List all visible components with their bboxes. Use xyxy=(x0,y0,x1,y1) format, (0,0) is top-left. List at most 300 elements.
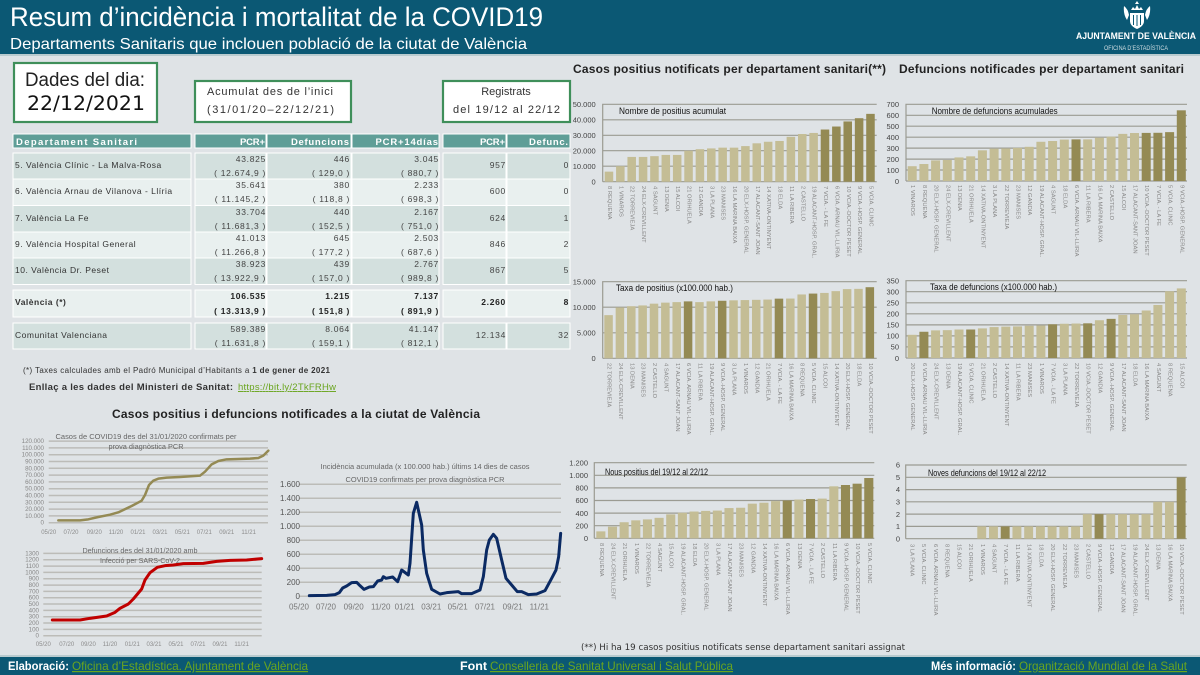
table header xyxy=(13,134,570,148)
bar chart: positive rate: 18 ELDA xyxy=(856,363,862,386)
bar chart: new positives: 13 DENIA xyxy=(796,543,802,569)
bar chart: new positives: 6 VCIA. ARNAU VIL-LLIRIA xyxy=(784,543,790,615)
row: Dr. Peset: 5 xyxy=(564,265,569,275)
ministry link xyxy=(29,382,336,393)
bar chart: cumulative positives: 23 MANISES xyxy=(720,186,726,220)
footer banner: Oficina d’Estadística. Ajuntament de València xyxy=(72,659,308,673)
line chart: cumulative deaths: 1000 xyxy=(25,569,40,576)
bar chart: death rate: 6 VCIA. ARNAU VIL-LLIRIA xyxy=(921,363,927,435)
organisation name: AJUNTAMENT DE VALÈNCIA xyxy=(1076,31,1196,41)
line chart: cumulative cases: 120.000 xyxy=(22,438,45,445)
bar chart: death rate: 0 xyxy=(895,354,899,363)
bar chart: positive rate: 22 TORREVIEJA xyxy=(606,363,612,407)
bar chart: death rate: 50 xyxy=(891,342,899,352)
row: La Fe: ( 11.681,3 ) xyxy=(215,221,266,231)
bar chart: death rate: 200 xyxy=(886,310,899,318)
line chart: 14-day incidence: 800 xyxy=(287,536,301,545)
bar chart: cumulative positives: 16 LA MARINA BAIXA xyxy=(731,186,737,243)
footer banner: Organització Mundial de la Salut xyxy=(1019,659,1188,673)
bar chart: new positives: 17 ALACANT-SANT JOAN xyxy=(726,543,732,612)
row: Clínic: 5. València Clínic - La Malva-Rosa xyxy=(15,160,162,170)
bar chart: new positives: 23 MANISES xyxy=(738,543,744,577)
row: Comunitat Valenciana: 32 xyxy=(558,330,569,340)
line chart: 14-day incidence: 05/21 xyxy=(448,602,468,612)
bar chart: cumulative deaths: 19 ALACANT-HOSP. GRAL. xyxy=(1038,185,1044,258)
bar chart: positive rate: 15.000 xyxy=(573,278,596,286)
bar chart: positive rate: 6 VCIA. ARNAU VIL-LLIRIA xyxy=(685,363,691,435)
bar chart: new deaths xyxy=(896,460,1187,617)
footer banner xyxy=(0,655,1200,675)
bar chart: new deaths: 2 CASTELLO xyxy=(1084,544,1090,580)
bar chart: positive rate: 20 ELX-HOSP. GENERAL xyxy=(844,363,850,431)
row: Dr. Peset: ( 13.922,9 ) xyxy=(214,273,266,283)
bar chart: death rate: 350 xyxy=(886,276,899,286)
line chart: cumulative deaths: 03/21 xyxy=(146,642,162,648)
bar chart: new deaths: 6 xyxy=(896,460,900,470)
bar chart: new positives: 200 xyxy=(575,522,588,530)
bar chart: death rate: 19 ALACANT-HOSP. GRAL. xyxy=(956,363,962,436)
line chart: cumulative cases: 01/21 xyxy=(130,530,146,536)
bar chart: positive rate: 9 VCIA.-HOSP. GENERAL xyxy=(719,363,725,432)
bar chart: cumulative positives: 10 VCIA.-DOCTOR PESET xyxy=(845,186,851,257)
bar chart: new positives: 800 xyxy=(575,484,588,492)
bar chart: new positives: 3 LA PLANA xyxy=(714,543,720,575)
row: La Fe: ( 152,5 ) xyxy=(312,221,350,231)
recent period box: del 19/12 al 22/12 xyxy=(453,104,560,116)
row: Hospital General: ( 687,6 ) xyxy=(401,247,439,257)
bar chart: cumulative deaths xyxy=(886,100,1187,258)
row: Arnau: ( 11.145,2 ) xyxy=(215,194,266,204)
bar chart: cumulative deaths: Nombre de defuncions acumulades xyxy=(932,106,1058,116)
bar chart: new deaths: 17 ALACANT-SANT JOAN xyxy=(1120,544,1126,613)
line chart: cumulative deaths: 700 xyxy=(29,588,40,595)
bar chart: positive rate: 7 VCIA. - LA FE xyxy=(776,363,782,404)
line chart: cumulative deaths: Infecció per SARS-CoV-2 xyxy=(100,558,180,565)
line chart: cumulative cases: 09/20 xyxy=(87,530,102,536)
line chart: cumulative deaths: 600 xyxy=(29,595,40,602)
line chart: cumulative cases: 30.000 xyxy=(25,499,45,506)
bar chart: positive rate: 3 LA PLANA xyxy=(731,363,737,395)
table header: Defuncions xyxy=(291,137,349,148)
line chart: cumulative deaths: 1100 xyxy=(26,563,40,570)
bar chart: positive rate: 10 VCIA.-DOCTOR PESET xyxy=(867,363,873,434)
line chart: cumulative deaths: 05/20 xyxy=(36,642,51,648)
bar chart: new positives: 24 ELX-CREVILLENT xyxy=(610,543,616,600)
bar chart: new deaths: 13 DENIA xyxy=(1155,544,1161,570)
date box: Dades del dia: xyxy=(25,70,145,91)
bar chart: death rate: Taxa de defuncions (x100.000 hab.) xyxy=(930,282,1057,292)
bar chart: death rate: 1 VINAROS xyxy=(1038,363,1044,394)
bar chart: new positives: Nous positius del 19/12 al 22/12 xyxy=(605,467,708,477)
bar chart: cumulative positives: 7 VCIA. - LA FE xyxy=(822,186,828,227)
line chart: 14-day incidence: 01/21 xyxy=(395,602,415,612)
bar chart: cumulative deaths: 2 CASTELLO xyxy=(1108,185,1114,221)
cumulative period box xyxy=(195,81,351,122)
bar chart: positive rate: 2 CASTELLO xyxy=(651,363,657,399)
bar chart: cumulative deaths: 300 xyxy=(886,144,899,153)
cumulative period box: Acumulat des de l’inici xyxy=(207,86,333,98)
line chart: cumulative deaths: 500 xyxy=(29,601,40,608)
row: Clínic: 43.825 xyxy=(236,154,266,164)
bar chart: cumulative positives: 4 SAGUNT xyxy=(652,186,658,215)
line chart: cumulative cases: 100.000 xyxy=(22,452,45,459)
line chart: cumulative cases: 60.000 xyxy=(25,479,45,486)
line chart: 14-day incidence: Incidència acumulada (x 100.000 hab.) últims 14 dies de casos xyxy=(320,464,530,471)
heading: deaths by department: Defuncions notificades per departament sanitari xyxy=(899,62,1184,76)
bar chart: new deaths: 10 VCIA.-DOCTOR PESET xyxy=(1178,544,1184,615)
line chart: 14-day incidence: 07/20 xyxy=(316,602,337,612)
bar chart: death rate: 5 VCIA. CLINIC xyxy=(968,363,974,404)
line chart: cumulative cases xyxy=(22,434,268,536)
row: Clínic: ( 129,0 ) xyxy=(312,168,350,178)
bar chart: cumulative positives xyxy=(573,100,877,259)
bar chart: positive rate: 17 ALACANT-SANT JOAN xyxy=(674,363,680,432)
bar chart: positive rate: 11 LA RIBERA xyxy=(696,363,702,401)
recent period box xyxy=(443,81,570,122)
line chart: cumulative cases: Casos de COVID19 des del 31/01/2020 confirmats per xyxy=(56,434,237,441)
footer banner: Conselleria de Sanitat Universal i Salut Pública xyxy=(490,659,733,673)
bar chart: positive rate: 23 MANISES xyxy=(640,363,646,397)
bar chart: death rate: 7 VCIA. - LA FE xyxy=(1050,363,1056,404)
row: Arnau xyxy=(13,179,570,206)
bar chart: positive rate: 13 DENIA xyxy=(628,363,634,389)
line chart: cumulative cases: 0 xyxy=(41,520,45,527)
row: La Fe: 440 xyxy=(334,207,350,217)
line chart: cumulative cases: 20.000 xyxy=(25,506,45,513)
bar chart: new deaths: 19 ALACANT-HOSP. GRAL. xyxy=(1131,544,1137,617)
bar chart: positive rate: 5 VCIA. CLINIC xyxy=(810,363,816,404)
bar chart: positive rate: 12 GANDIA xyxy=(753,363,759,393)
bar chart: cumulative positives: 0 xyxy=(592,178,596,186)
row: Hospital General: 9. València Hospital General xyxy=(15,239,136,249)
header banner xyxy=(0,0,1200,56)
bar chart: new deaths: 24 ELX-CREVILLENT xyxy=(1143,544,1149,601)
line chart: cumulative cases: 70.000 xyxy=(25,472,45,479)
bar chart: new deaths: 22 TORREVIEJA xyxy=(1061,544,1067,588)
bar chart: cumulative positives: 22 TORREVIEJA xyxy=(629,186,635,230)
bar chart: death rate: 250 xyxy=(886,298,899,308)
line chart: cumulative deaths: 09/21 xyxy=(212,642,228,648)
bar chart: positive rate: 10.000 xyxy=(573,303,596,312)
bar chart: new deaths: 16 LA MARINA BAIXA xyxy=(1166,544,1172,601)
row: La Fe: ( 751,0 ) xyxy=(401,221,439,231)
line chart: cumulative deaths: 11/21 xyxy=(234,642,250,648)
bar chart: cumulative positives: 3 LA PLANA xyxy=(708,186,714,218)
line chart: 14-day incidence xyxy=(280,464,561,612)
bar chart: cumulative deaths: 10 VCIA.-DOCTOR PESET xyxy=(1143,185,1149,256)
bar chart: new positives: 14 XATIVA-ONTINYENT xyxy=(761,543,767,607)
row: Dr. Peset: 38.923 xyxy=(236,259,266,269)
bar chart: death rate: 22 TORREVIEJA xyxy=(1073,363,1079,407)
bar chart: death rate: 16 LA MARINA BAIXA xyxy=(1143,363,1149,420)
row: Dr. Peset: 439 xyxy=(334,259,350,269)
table header: Departament Sanitari xyxy=(16,137,137,148)
line chart: cumulative deaths: Defuncions des del 31/01/2020 amb xyxy=(82,548,198,555)
footer banner: Elaboració: xyxy=(8,659,69,673)
line chart: 14-day incidence: 11/21 xyxy=(530,602,550,612)
line chart: cumulative deaths: 05/21 xyxy=(168,642,184,648)
bar chart: death rate: 150 xyxy=(886,320,899,330)
bar chart: new positives: 21 ORIHUELA xyxy=(621,543,627,581)
row: Hospital General: ( 11.266,8 ) xyxy=(215,247,266,257)
line chart: cumulative cases: 03/21 xyxy=(152,530,168,536)
bar chart: cumulative deaths: 200 xyxy=(886,155,899,164)
date box: 22/12/2021 xyxy=(27,92,145,115)
line chart: cumulative deaths: 800 xyxy=(29,582,40,589)
bar chart: new deaths: 23 MANISES xyxy=(1073,544,1079,578)
bar chart: death rate: 14 XATIVA-ONTINYENT xyxy=(1003,363,1009,427)
bar chart: cumulative deaths: 15 ALCOI xyxy=(1120,185,1126,211)
line chart: cumulative deaths: 07/20 xyxy=(59,642,75,648)
line chart: 14-day incidence: 07/21 xyxy=(475,602,496,612)
bar chart: cumulative deaths: 18 ELDA xyxy=(1061,185,1067,208)
ministry link: Enllaç a les dades del Ministeri de Sanitat: xyxy=(29,382,233,393)
row: Comunitat Valenciana: 8.064 xyxy=(325,324,350,334)
row: Arnau: ( 118,8 ) xyxy=(313,194,350,204)
line chart: cumulative deaths: 11/20 xyxy=(103,642,118,648)
row: Hospital General: ( 177,2 ) xyxy=(312,247,350,257)
bar chart: death rate: 21 ORIHUELA xyxy=(979,363,985,401)
line chart: cumulative cases: 40.000 xyxy=(25,492,45,500)
bar chart: cumulative deaths: 21 ORIHUELA xyxy=(968,185,974,223)
bar chart: new positives: 0 xyxy=(584,534,588,543)
bar chart: cumulative deaths: 1 VINAROS xyxy=(909,185,915,216)
line chart: 14-day incidence: 1.000 xyxy=(280,522,301,531)
line chart: cumulative cases: 90.000 xyxy=(25,458,45,466)
footer banner: Més informació: xyxy=(931,659,1016,673)
footnote on rates: (*) Taxes calculades amb el Padró Municipal d’Habitants a 1 de gener de 2021 xyxy=(23,366,331,375)
bar chart: cumulative deaths: 0 xyxy=(895,177,899,186)
bar chart: new deaths: 6 VCIA. ARNAU VIL-LLIRIA xyxy=(932,544,938,616)
bar chart: cumulative positives: 17 ALACANT-SANT JOAN xyxy=(754,186,760,255)
bar chart: cumulative deaths: 8 REQUENA xyxy=(921,185,927,219)
heading: positive cases by department: Casos positius notificats per departament sanitari(**) xyxy=(573,62,886,76)
bar chart: new deaths: 21 ORIHUELA xyxy=(967,544,973,582)
line chart: cumulative deaths: 0 xyxy=(36,633,40,640)
bar chart: cumulative deaths: 14 XATIVA-ONTINYENT xyxy=(979,185,985,249)
bar chart: death rate: 12 GANDIA xyxy=(1096,363,1102,393)
bar chart: cumulative deaths: 16 LA MARINA BAIXA xyxy=(1096,185,1102,242)
bar chart: new positives: 1 VINAROS xyxy=(633,543,639,574)
bar chart: new deaths: 4 xyxy=(896,485,900,494)
row: Hospital General: 846 xyxy=(490,239,506,249)
bar chart: new positives: 2 CASTELLO xyxy=(819,543,825,579)
bar chart: death rate: 8 REQUENA xyxy=(1167,363,1173,397)
bar chart: cumulative deaths: 700 xyxy=(886,100,899,109)
row: Hospital General: 2 xyxy=(564,239,569,249)
table header: PCR+ xyxy=(240,137,265,148)
row: Hospital General: 41.013 xyxy=(236,233,266,243)
row: València total: ( 13.313,9 ) xyxy=(214,306,266,316)
line chart: cumulative cases: 50.000 xyxy=(25,486,45,493)
bar chart: new positives: 19 ALACANT-HOSP. GRAL. xyxy=(679,543,685,616)
bar chart: new deaths: 4 SAGUNT xyxy=(990,544,996,573)
line chart: cumulative deaths: 400 xyxy=(29,607,40,614)
bar chart: new deaths: 3 xyxy=(896,498,900,506)
line chart: 14-day incidence: 1.400 xyxy=(280,494,301,503)
data table xyxy=(13,134,570,349)
line chart: 14-day incidence: 1.600 xyxy=(280,480,301,489)
organisation unit: OFICINA D’ESTADÍSTICA xyxy=(1104,45,1168,52)
row: La Fe: 2.167 xyxy=(414,207,439,217)
line chart: 14-day incidence: 0 xyxy=(296,592,301,601)
bar chart: death rate: 18 ELDA xyxy=(1132,363,1138,386)
bar chart: new positives xyxy=(569,458,874,616)
line chart: 14-day incidence: 1.200 xyxy=(280,508,301,517)
bar chart: cumulative positives: 20 ELX-HOSP. GENERAL xyxy=(742,186,748,254)
row: Comunitat Valenciana: Comunitat Valenciana xyxy=(15,330,108,340)
row: Clínic: 0 xyxy=(564,160,569,170)
bar chart: cumulative deaths: 22 TORREVIEJA xyxy=(1003,185,1009,229)
bar chart: death rate: 11 LA RIBERA xyxy=(1014,363,1020,401)
bar chart: cumulative positives: 24 ELX-CREVILLENT xyxy=(640,186,646,243)
icon: city crest xyxy=(1124,1,1150,29)
bar chart: cumulative positives: 19 ALACANT-HOSP. GRAL. xyxy=(811,186,817,259)
table header: Defunc. xyxy=(529,137,568,148)
bar chart: death rate xyxy=(886,276,1187,436)
subtitle: Departaments Sanitaris que inclouen població de la ciutat de València xyxy=(10,36,527,53)
recent period box: Registrats xyxy=(481,86,531,98)
line chart: 14-day incidence: 09/20 xyxy=(344,602,364,612)
bar chart: new positives: 1.200 xyxy=(569,458,588,468)
line chart: 14-day incidence: 400 xyxy=(287,564,301,573)
bar chart: positive rate: 1 VINAROS xyxy=(742,363,748,394)
cumulative period box: (31/01/20–22/12/21) xyxy=(207,104,334,116)
bar chart: new deaths: 8 REQUENA xyxy=(944,544,950,578)
line chart: cumulative deaths xyxy=(25,548,262,648)
row: València total: 106.535 xyxy=(230,291,266,301)
bar chart: new deaths: Noves defuncions del 19/12 al 22/12 xyxy=(928,468,1046,478)
line chart: cumulative cases: 11/21 xyxy=(241,530,257,536)
bar chart: new positives: 9 VCIA.-HOSP. GENERAL xyxy=(842,543,848,612)
bar chart: cumulative positives: 6 VCIA. ARNAU VIL-LLIRIA xyxy=(833,186,839,258)
row: Comunitat Valenciana: ( 812,1 ) xyxy=(401,338,439,348)
bar chart: new deaths: 5 VCIA. CLINIC xyxy=(920,544,926,585)
bar chart: new deaths: 15 ALCOI xyxy=(955,544,961,570)
bar chart: death rate: 20 ELX-HOSP. GENERAL xyxy=(909,363,915,431)
bar chart: cumulative positives: 13 DENIA xyxy=(663,186,669,212)
bar chart: cumulative positives: 9 VCIA.-HOSP. GENERAL xyxy=(856,186,862,255)
line chart: cumulative deaths: 01/21 xyxy=(125,642,140,648)
bar chart: new deaths: 7 VCIA. - LA FE xyxy=(1002,544,1008,585)
bar chart: cumulative deaths: 100 xyxy=(886,166,899,175)
bar chart: cumulative positives: 20.000 xyxy=(573,146,596,156)
bar chart: new positives: 11 LA RIBERA xyxy=(831,543,837,581)
row: València total: ( 891,9 ) xyxy=(401,306,439,316)
bar chart: cumulative positives: 8 REQUENA xyxy=(606,186,612,220)
bar chart: positive rate: 16 LA MARINA BAIXA xyxy=(787,363,793,420)
line chart: cumulative cases: 05/21 xyxy=(175,530,190,536)
line chart: cumulative deaths: 300 xyxy=(29,614,40,621)
line chart: cumulative deaths: 1200 xyxy=(25,557,40,564)
bar chart: death rate: 17 ALACANT-SANT JOAN xyxy=(1120,363,1126,432)
bar chart: death rate: 100 xyxy=(886,332,899,340)
line chart: cumulative deaths: 09/20 xyxy=(81,642,96,648)
bar chart: new deaths: 3 LA PLANA xyxy=(908,544,914,576)
row: València total: ( 151,8 ) xyxy=(312,306,350,316)
bar chart: new deaths: 1 xyxy=(896,522,900,531)
line chart: cumulative cases: 80.000 xyxy=(25,465,45,472)
bar chart: cumulative deaths: 6 VCIA. ARNAU VIL-LLIRIA xyxy=(1073,185,1079,257)
bar chart: new deaths: 20 ELX-HOSP. GENERAL xyxy=(1049,544,1055,612)
row: La Fe: 7. València La Fe xyxy=(15,213,89,223)
bar chart: new deaths: 14 XATIVA-ONTINYENT xyxy=(1026,544,1032,608)
row: Clínic: ( 880,7 ) xyxy=(401,168,439,178)
row: Dr. Peset xyxy=(13,258,570,284)
row: Clínic xyxy=(13,153,570,179)
bar chart: cumulative deaths: 4 SAGUNT xyxy=(1050,185,1056,214)
row: Arnau: ( 698,3 ) xyxy=(401,194,439,204)
line chart: cumulative deaths: 07/21 xyxy=(190,642,206,648)
line chart: 14-day incidence: 200 xyxy=(287,578,301,587)
bar chart: cumulative positives: 1 VINAROS xyxy=(617,186,623,217)
bar chart: death rate: 2 CASTELLO xyxy=(991,363,997,399)
row: Arnau: 35.641 xyxy=(236,180,266,190)
line chart: cumulative cases: 110.000 xyxy=(22,445,45,452)
bar chart: positive rate: Taxa de positius (x100.000 hab.) xyxy=(616,283,733,293)
row: Clínic: 446 xyxy=(334,154,350,164)
bar chart: cumulative positives: 10.000 xyxy=(573,162,596,171)
bar chart: cumulative deaths: 17 ALACANT-SANT JOAN xyxy=(1132,185,1138,254)
row: La Fe: 1 xyxy=(564,213,569,223)
row: València total: 8 xyxy=(564,297,569,307)
row: Clínic: ( 12.674,9 ) xyxy=(214,168,266,178)
row: Hospital General: 2.503 xyxy=(414,233,439,243)
bar chart: cumulative deaths: 11 LA RIBERA xyxy=(1085,185,1091,223)
row: Arnau: 0 xyxy=(564,186,569,196)
bar chart: new positives: 20 ELX-HOSP. GENERAL xyxy=(703,543,709,611)
bar chart: new positives: 1.000 xyxy=(569,471,588,480)
line chart: cumulative deaths: 900 xyxy=(29,576,40,583)
bar chart: new positives: 12 GANDIA xyxy=(749,543,755,573)
bar chart: positive rate: 0 xyxy=(592,354,596,363)
footer banner: Font xyxy=(460,659,487,673)
bar chart: cumulative positives: 30.000 xyxy=(573,131,596,140)
bar chart: cumulative deaths: 600 xyxy=(886,111,899,120)
row: València total: 7.137 xyxy=(414,291,439,301)
row: Comunitat Valenciana: 12.134 xyxy=(476,330,506,340)
bar chart: death rate: 4 SAGUNT xyxy=(1155,363,1161,392)
bar chart: cumulative deaths: 3 LA PLANA xyxy=(991,185,997,217)
bar chart: cumulative positives: 11 LA RIBERA xyxy=(788,186,794,224)
line chart: 14-day incidence: 600 xyxy=(287,550,301,559)
row: Arnau: 380 xyxy=(334,180,350,190)
bar chart: cumulative deaths: 24 ELX-CREVILLENT xyxy=(944,185,950,242)
row: Dr. Peset: 10. València Dr. Peset xyxy=(15,265,110,275)
line chart: 14-day incidence: 05/20 xyxy=(289,602,310,612)
row: València total: 2.260 xyxy=(481,297,506,307)
row: La Fe xyxy=(13,206,570,232)
bar chart: cumulative positives: 40.000 xyxy=(573,116,596,124)
line chart: cumulative cases: prova diagnòstica PCR xyxy=(108,444,184,451)
row: Dr. Peset: ( 989,8 ) xyxy=(401,273,439,283)
bar chart: death rate: 15 ALCOI xyxy=(1178,363,1184,389)
bar chart: new deaths: 2 xyxy=(896,510,900,519)
bar chart: cumulative deaths: 5 VCIA. CLINIC xyxy=(1167,185,1173,226)
bar chart: cumulative deaths: 20 ELX-HOSP. GENERAL xyxy=(933,185,939,253)
line chart: cumulative deaths: 100 xyxy=(29,626,40,633)
bar chart: new positives: 600 xyxy=(575,496,588,505)
row: Hospital General xyxy=(13,232,570,258)
bar chart: new deaths: 5 xyxy=(896,473,900,482)
row: Arnau: 6. València Arnau de Vilanova - Llíria xyxy=(15,186,173,196)
bar chart: new deaths: 1 VINAROS xyxy=(979,544,985,575)
line chart: 14-day incidence: COVID19 confirmats per prova diagnòstica PCR xyxy=(346,477,504,484)
line chart: cumulative cases: 10.000 xyxy=(25,513,45,520)
date box xyxy=(14,63,157,122)
bar chart: positive rate xyxy=(573,278,877,436)
ministry link: https://bit.ly/2TkFRHw xyxy=(238,382,336,393)
